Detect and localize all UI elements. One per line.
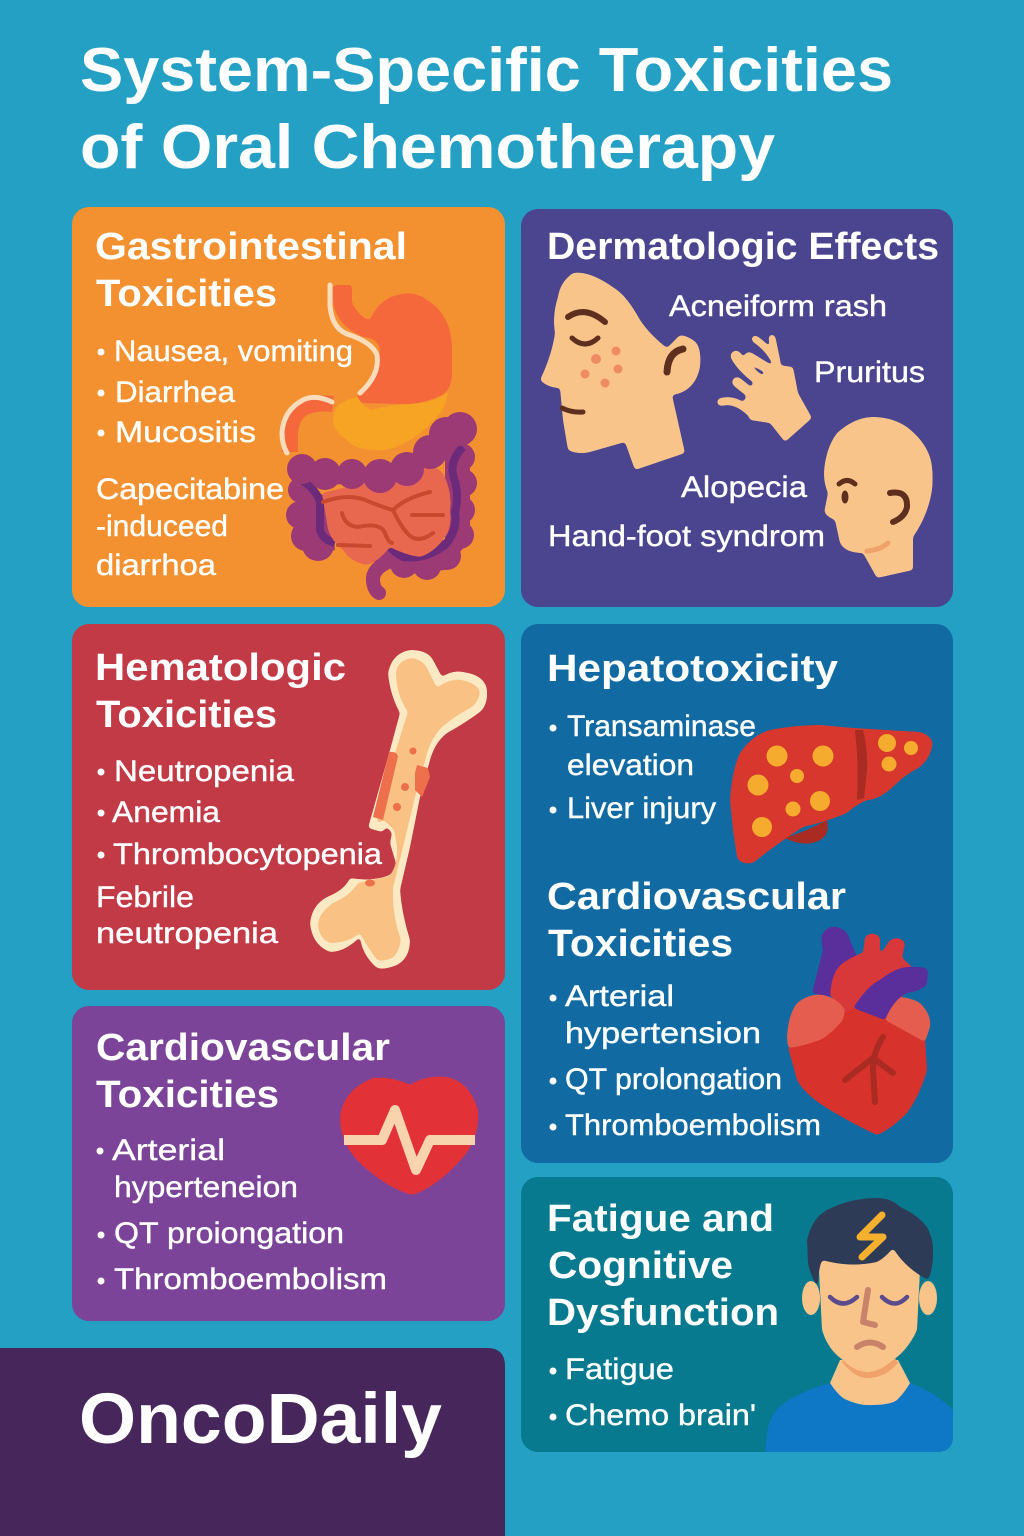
heading: fatigue: [547, 1198, 779, 1334]
title: System-Specific Toxicities: [80, 36, 893, 105]
list: hematologic symptoms: Neutropenia: [114, 755, 294, 788]
list: gi symptoms: Mucositis: [115, 416, 256, 449]
title: of Oral Chemotherapy: [80, 113, 776, 182]
heading: cardiovascular toxicities (left): [96, 1027, 390, 1116]
illustration: anatomical heart: [787, 927, 930, 1135]
panel: fatigue and cognitive dysfunction: [521, 1177, 953, 1452]
list: fatigue symptoms: Chemo brain': [565, 1399, 756, 1432]
list: hematologic symptoms: Thrombocytopenia: [113, 838, 382, 871]
logo text: oncodaily: OncoDaily: [79, 1380, 443, 1459]
illustration: liver: [730, 725, 932, 863]
label: alopecia: Alopecia: [681, 471, 807, 504]
note: febrile neutropenia: Febrile: [96, 881, 194, 914]
list: cardiovascular symptoms (right): QT prolongation: [565, 1063, 782, 1096]
list: cardiovascular symptoms (right): [550, 980, 821, 1142]
list: hepatic symptoms: elevation: [567, 749, 694, 782]
note: febrile neutropenia: neutropenia: [96, 917, 278, 950]
list: fatigue symptoms: Fatigue: [565, 1353, 674, 1386]
heading: gastrointestinal: Gastrointestinal: [95, 226, 407, 268]
heading: fatigue: Dysfunction: [547, 1292, 779, 1334]
panel: hematologic toxicities: [72, 624, 505, 990]
list: hepatic symptoms: [550, 710, 756, 825]
label: pruritus: Pruritus: [814, 356, 925, 389]
heading: cardiovascular toxicities (right): Toxicities: [548, 923, 733, 965]
heading: hematologic: Hematologic: [95, 647, 346, 689]
list: cardiovascular symptoms (left): Thromboembolism: [114, 1263, 387, 1296]
list: hematologic symptoms: Anemia: [112, 796, 220, 829]
panel: dermatologic effects: [521, 209, 953, 607]
illustration: scratching hand: [721, 338, 812, 442]
heading: hematologic: [95, 647, 346, 736]
heading: cardiovascular toxicities (left): Cardiovascular: [96, 1027, 390, 1069]
list: hepatic symptoms: Transaminase: [567, 710, 756, 743]
note: capecitabine: Capecitabine: [96, 473, 284, 506]
heading: cardiovascular toxicities (right): Cardiovascular: [547, 876, 846, 918]
list: gi symptoms: Nausea, vomiting: [114, 335, 353, 368]
panel: gastrointestinal toxicities: [72, 207, 505, 607]
list: cardiovascular symptoms (left): [96, 1134, 387, 1296]
title: [80, 36, 893, 182]
icon: heart with ecg line: [340, 1077, 478, 1195]
heading: cardiovascular toxicities (right): [547, 876, 846, 965]
note: febrile neutropenia: [96, 881, 278, 950]
illustration: bone: [310, 650, 487, 969]
illustration: face with rash: [540, 273, 700, 470]
illustration: tired person: [765, 1198, 953, 1452]
panel: hepatotoxicity and cardiovascular: [521, 624, 953, 1163]
note: capecitabine: [96, 473, 284, 582]
list: gi symptoms: [98, 335, 353, 449]
list: cardiovascular symptoms (right): hypertension: [565, 1017, 761, 1050]
list: fatigue symptoms: [550, 1353, 756, 1432]
heading: cardiovascular toxicities (left): Toxicities: [96, 1074, 279, 1116]
label: hand-foot syndrome: Hand-foot syndrom: [548, 520, 825, 553]
heading: hepatotoxicity: Hepatotoxicity: [547, 648, 838, 690]
heading: fatigue: Cognitive: [548, 1245, 733, 1287]
note: capecitabine: -induceed: [96, 510, 228, 543]
list: cardiovascular symptoms (right): Thromboembolism: [565, 1109, 821, 1142]
illustration: stomach and intestines: [282, 285, 477, 593]
list: hematologic symptoms: [98, 755, 382, 871]
list: cardiovascular symptoms (left): QT proiongation: [114, 1217, 344, 1250]
list: hepatic symptoms: Liver injury: [567, 792, 716, 825]
list: cardiovascular symptoms (left): Arterial: [112, 1134, 225, 1167]
panel: cardiovascular toxicities (left): [72, 1006, 505, 1321]
heading: dermatologic: Dermatologic Effects: [547, 226, 939, 268]
panel: brand footer: [0, 1348, 505, 1536]
heading: gastrointestinal: [95, 226, 407, 315]
heading: fatigue: Fatigue and: [547, 1198, 774, 1240]
heading: hematologic: Toxicities: [96, 694, 277, 736]
heading: gastrointestinal: Toxicities: [96, 273, 277, 315]
note: capecitabine: diarrhoa: [96, 549, 216, 582]
illustration: bald head: [824, 417, 933, 578]
list: cardiovascular symptoms (right): Arterial: [565, 980, 674, 1013]
list: cardiovascular symptoms (left): hyperteneion: [114, 1171, 298, 1204]
label: acneiform rash: Acneiform rash: [669, 290, 887, 323]
list: gi symptoms: Diarrhea: [115, 376, 235, 409]
